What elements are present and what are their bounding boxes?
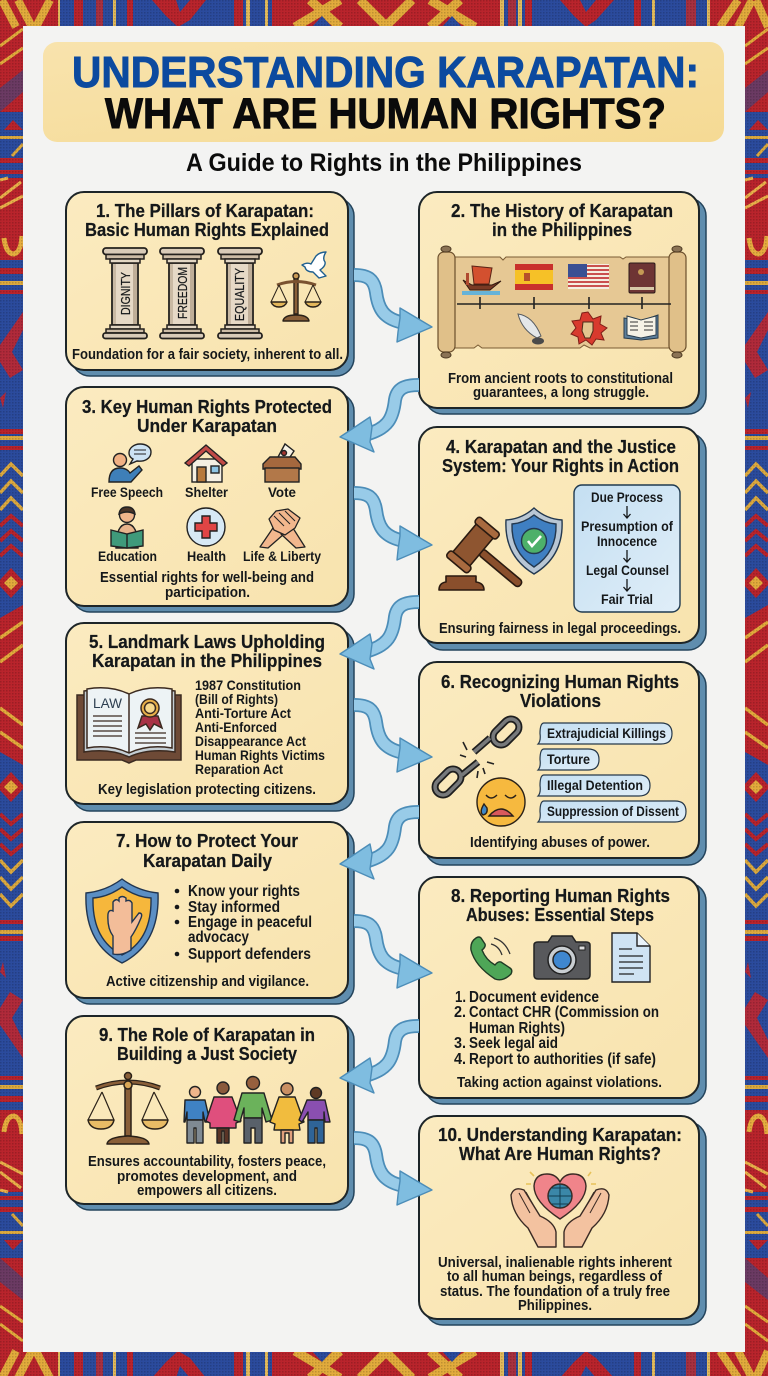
label: Education [98,548,157,564]
heading: 4. Karapatan and the Justice [446,436,676,457]
bullet list: advocacy [188,929,249,946]
heading: in the Philippines [492,219,632,240]
icon: quill [518,314,544,344]
icon: open book [624,315,658,340]
icon: house [185,445,227,482]
tag: extrajudicial killings: Extrajudicial Killings [547,726,666,741]
heading: 2. The History of Karapatan [451,200,673,221]
heading [99,1024,315,1064]
heading [442,436,679,476]
icon: law book: LAW [93,695,123,711]
arrow: panel 3 to 4 [354,493,432,560]
caption: Ensures accountability, fosters peace, [88,1154,326,1170]
icon: clasped hands [260,509,305,548]
tag: illegal detention: Illegal Detention [547,778,643,793]
caption: Universal, inalienable rights inherent [438,1255,672,1271]
numbered steps: 2. [454,1004,466,1021]
arrow: panel 6 to 7 [340,812,419,879]
label: Vote [268,484,296,500]
process flow box: Fair Trial [601,592,653,607]
caption: empowers all citizens. [137,1183,277,1199]
panel 2: history of karapatan [419,192,706,414]
numbered steps: Report to authorities (if safe) [469,1051,656,1068]
tag: extrajudicial killings [538,723,672,744]
icon: heart globe in hands [511,1172,609,1247]
subtitle: A Guide to Rights in the Philippines [186,149,582,177]
list of laws: (Bill of Rights) [195,692,278,707]
person four [270,1083,304,1143]
panel 1: pillars of karapatan [66,192,354,376]
tag: suppression of dissent: Suppression of Dissent [547,804,679,819]
heading [82,396,332,436]
process flow box: Legal Counsel [586,563,669,578]
icon: scale and dove [271,252,326,321]
heading: Abuses: Essential Steps [466,904,654,925]
caption: Essential rights for well-being and [100,570,314,586]
person five [299,1088,330,1143]
list of laws: Human Rights Victims [195,748,325,763]
bullet list: Know your rights [188,883,300,900]
caption: participation. [165,585,250,601]
numbered steps [454,989,659,1068]
heading [85,200,329,240]
heading: 6. Recognizing Human Rights [441,671,679,692]
icon: people holding hands [184,1076,330,1143]
panel 6: recognizing violations [419,662,706,865]
caption: promotes development, and [117,1169,297,1185]
icon: balance scale [88,1072,168,1144]
heading: 1. The Pillars of Karapatan: [96,200,314,221]
title line two: WHAT ARE HUMAN RIGHTS? [105,90,666,138]
numbered steps: Document evidence [469,989,599,1006]
caption: Active citizenship and vigilance. [106,974,309,990]
bullet list: Engage in peaceful [188,914,312,931]
process flow box [574,485,680,612]
icon: crying face [477,778,525,826]
tag: torture: Torture [547,752,590,767]
icon: constitution book [629,263,655,293]
caption: to all human beings, regardless of [447,1269,662,1285]
tag: suppression of dissent [538,801,686,822]
list of laws [195,678,325,777]
bullet list: Support defenders [188,946,311,963]
heading: Violations [520,690,601,711]
icon: shield with raised hand [86,879,158,963]
arrow: panel 7 to 8 [354,921,432,988]
panel 5: landmark laws [66,623,354,811]
icon: education reader [111,507,143,548]
process flow box: Innocence [597,534,657,549]
process flow box: Due Process [591,490,663,505]
heading: Under Karapatan [137,415,277,436]
panel 8: reporting abuses [419,877,706,1104]
numbered steps: Contact CHR (Commission on [469,1004,659,1021]
caption: Identifying abuses of power. [470,835,650,851]
bullet list [175,883,312,963]
caption [88,1154,326,1199]
numbered steps: 3. [454,1035,466,1052]
icon: law book [77,688,181,763]
caption: status. The foundation of a truly free [440,1284,670,1300]
panel 7: protect your karapatan [66,822,354,1004]
tag: torture [538,749,599,770]
caption: From ancient roots to constitutional [448,371,673,387]
heading: 9. The Role of Karapatan in [99,1024,315,1045]
icon: broken chain [432,716,522,798]
panel 10: what are human rights [419,1116,706,1325]
list of laws: Disappearance Act [195,734,306,749]
icon: gavel [439,516,537,605]
heading: 10. Understanding Karapatan: [438,1124,682,1145]
person two [206,1082,241,1143]
icon: phone [471,937,512,980]
icon: parchment scroll timeline [438,246,686,358]
heading: Karapatan in the Philippines [92,650,322,671]
arrow: panel 8 to 9 [340,1026,419,1093]
caption: Taking action against violations. [457,1075,662,1091]
list of laws: 1987 Constitution [195,678,301,693]
panel 9: just society [66,1016,354,1210]
person one [184,1086,210,1143]
list of laws: Anti-Torture Act [195,706,291,721]
bullet list: Stay informed [188,899,280,916]
caption: Philippines. [518,1298,592,1314]
icon: usa flag [568,264,609,289]
caption: Key legislation protecting citizens. [98,782,316,798]
icon: ship [462,266,501,295]
arrow: panel 4 to 5 [340,602,419,669]
title banner [43,42,724,142]
heading: 7. How to Protect Your [116,830,298,851]
panel 3: key human rights [66,387,354,612]
arrow: panel 9 to 10 [354,1138,432,1205]
process flow box: Presumption of [581,519,673,534]
heading: 8. Reporting Human Rights [451,885,670,906]
numbered steps: 1. [455,989,466,1006]
heading: Karapatan Daily [143,850,273,871]
heading: What Are Human Rights? [459,1143,661,1164]
list of laws: Anti-Enforced [195,720,277,735]
icon: three pillars: DIGNITY [119,271,133,315]
arrow: panel 5 to 6 [354,705,432,772]
person three [234,1076,272,1143]
heading [89,631,325,671]
icon: document [612,933,650,982]
heading: Building a Just Society [117,1043,298,1064]
icon: spanish flag [515,264,553,290]
heading: 3. Key Human Rights Protected [82,396,332,417]
numbered steps: Human Rights) [469,1020,565,1037]
label: Shelter [185,484,228,500]
label: Life & Liberty [243,548,321,564]
label: Health [187,548,226,564]
caption: Foundation for a fair society, inherent to all. [72,347,343,363]
caption [100,570,314,601]
heading [438,1124,682,1164]
icon: raised fist burst [571,312,607,345]
icon: three pillars: EQUALITY [233,267,247,321]
heading: System: Your Rights in Action [442,455,679,476]
arrow: panel 2 to 3 [340,385,419,452]
heading [441,671,679,711]
icon: camera [534,936,590,979]
title line one: UNDERSTANDING KARAPATAN: [72,48,699,97]
panel 4: justice system [419,427,706,650]
arrow: panel 1 to 2 [354,275,432,342]
heading [451,885,670,925]
icon: shield with check [506,508,562,574]
icon: health cross [187,508,225,546]
numbered steps: 4. [454,1051,466,1068]
heading: 5. Landmark Laws Upholding [89,631,325,652]
tag: illegal detention [538,775,650,796]
heading: Basic Human Rights Explained [85,219,329,240]
heading [116,830,298,871]
label: Free Speech [91,484,163,500]
icon: free speech [109,444,151,482]
heading [451,200,673,240]
list of laws: Reparation Act [195,762,283,777]
icon: three pillars [103,248,262,338]
icon: ballot box [263,444,301,482]
caption: guarantees, a long struggle. [473,385,649,401]
numbered steps: Seek legal aid [469,1035,558,1052]
caption [438,1255,672,1314]
timeline [457,297,671,309]
icon: three pillars: FREEDOM [176,267,190,319]
caption: Ensuring fairness in legal proceedings. [439,621,681,637]
caption [448,371,673,401]
